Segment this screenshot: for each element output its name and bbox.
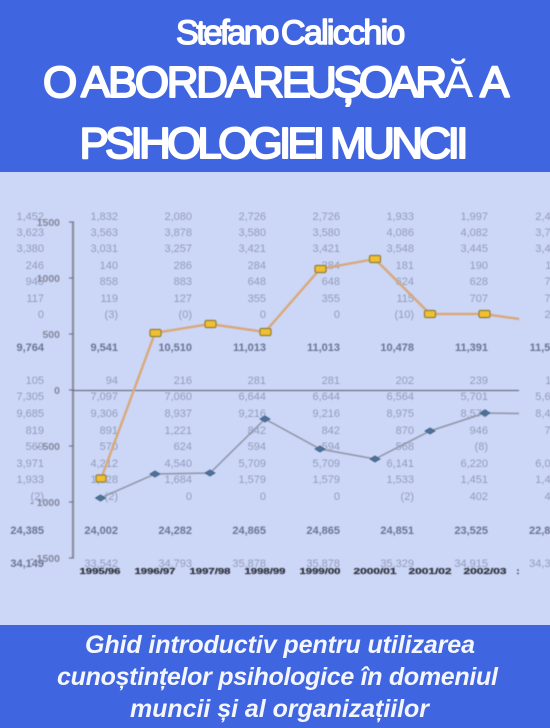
x axis year labels: 2001/02 bbox=[408, 567, 452, 576]
column 6: (2) bbox=[401, 491, 414, 503]
orange series line and markers bbox=[96, 256, 519, 482]
column 3: 4,540 bbox=[164, 458, 192, 470]
column 4: 842 bbox=[248, 425, 266, 437]
column 1: 117 bbox=[26, 293, 44, 305]
column 7: 23,525 bbox=[454, 525, 488, 537]
column 3: 24,282 bbox=[158, 525, 192, 537]
column 2: 94 bbox=[106, 375, 118, 387]
column 1: 0 bbox=[38, 309, 44, 321]
column 4: 35,878 bbox=[232, 558, 266, 570]
y axis with ticks bbox=[69, 222, 74, 558]
column 6: 3,548 bbox=[386, 243, 414, 255]
column 3: 10,510 bbox=[158, 342, 192, 354]
column 6: 10,478 bbox=[380, 342, 414, 354]
column 1: 569 bbox=[26, 441, 44, 453]
y axis labels: - 1500 bbox=[30, 553, 60, 565]
x axis year labels: 2000/01 bbox=[354, 567, 397, 576]
column 4 bbox=[232, 211, 266, 570]
column 6: 568 bbox=[396, 441, 414, 453]
x axis year labels: 1998/99 bbox=[244, 567, 286, 576]
column 6: 6,564 bbox=[386, 391, 414, 403]
panel: header band bbox=[0, 0, 550, 172]
column 1: 1,933 bbox=[16, 474, 44, 486]
x axis year labels: 1999/00 bbox=[300, 567, 341, 576]
column 3: 883 bbox=[174, 276, 192, 288]
column 4: 648 bbox=[248, 276, 266, 288]
column 4: 2,726 bbox=[238, 211, 266, 223]
column 7: 707 bbox=[470, 293, 488, 305]
column 4: 284 bbox=[248, 260, 266, 272]
column 5: 2,726 bbox=[312, 211, 340, 223]
column 7: 3 bbox=[482, 309, 488, 321]
column 6: 6,141 bbox=[386, 458, 414, 470]
column 1: 9,685 bbox=[16, 408, 44, 420]
column 3 bbox=[158, 211, 192, 570]
column 7: 34,915 bbox=[454, 558, 488, 570]
title line 1: O bbox=[43, 58, 77, 107]
column 1: 945 bbox=[26, 276, 44, 288]
x axis year labels: 1997/98 bbox=[190, 567, 231, 576]
x axis year labels: 2002/03 bbox=[464, 567, 507, 576]
column 2: (2) bbox=[105, 491, 118, 503]
column 4: 0 bbox=[260, 491, 266, 503]
x axis year labels: 1995/96 bbox=[80, 567, 121, 576]
column 7: (8) bbox=[475, 441, 488, 453]
column 7: 6,220 bbox=[460, 458, 488, 470]
column 4: 1,579 bbox=[238, 474, 266, 486]
column 4: 3,580 bbox=[238, 227, 266, 239]
column 2: 3,031 bbox=[90, 243, 118, 255]
x axis year labels: : bbox=[517, 567, 519, 576]
data table: faded figures behind the chart bbox=[10, 211, 550, 570]
column 4: 9,216 bbox=[238, 408, 266, 420]
y axis labels: 1500 bbox=[37, 217, 60, 229]
column 1: 7,305 bbox=[16, 391, 44, 403]
column 6: (10) bbox=[394, 309, 414, 321]
column 2: 1,832 bbox=[90, 211, 118, 223]
column 2: 570 bbox=[100, 441, 118, 453]
column 7: 8,570 bbox=[460, 408, 488, 420]
title line 1: ABORDARE bbox=[81, 58, 310, 107]
column 1: 1,452 bbox=[16, 211, 44, 223]
y axis labels: 500 bbox=[42, 329, 60, 341]
column 5: 355 bbox=[322, 293, 340, 305]
column 4: 5,709 bbox=[238, 458, 266, 470]
column 3: (0) bbox=[179, 309, 192, 321]
column 3: 127 bbox=[174, 293, 192, 305]
column 7: 239 bbox=[470, 375, 488, 387]
y axis labels: 1000 bbox=[37, 273, 60, 285]
column 5: 648 bbox=[322, 276, 340, 288]
column 3: 0 bbox=[186, 491, 192, 503]
column 2: 858 bbox=[100, 276, 118, 288]
y axis labels: - 1000 bbox=[30, 497, 60, 509]
column 5: 24,865 bbox=[306, 525, 340, 537]
column 1: 3,623 bbox=[16, 227, 44, 239]
column 7: 1,451 bbox=[460, 474, 488, 486]
y axis labels: - 500 bbox=[36, 441, 60, 453]
column 7: 628 bbox=[470, 276, 488, 288]
panel: chart background bbox=[0, 172, 550, 625]
column 7: 11,391 bbox=[455, 342, 488, 354]
column 8, cropped at the page edge bbox=[529, 211, 550, 570]
column 2: (3) bbox=[105, 309, 118, 321]
column 7: 402 bbox=[470, 491, 488, 503]
column 6: 8,975 bbox=[386, 408, 414, 420]
column 1: 819 bbox=[26, 425, 44, 437]
column 2: 140 bbox=[100, 260, 118, 272]
column 4: 3,421 bbox=[238, 243, 266, 255]
column 4: 6,644 bbox=[238, 391, 266, 403]
column 2: 33,542 bbox=[84, 558, 118, 570]
column 5: 594 bbox=[322, 441, 340, 453]
column 1: 24,385 bbox=[10, 525, 44, 537]
y axis labels: 0 bbox=[54, 385, 60, 397]
column 5: 3,421 bbox=[312, 243, 340, 255]
column 1: 34,149 bbox=[10, 558, 44, 570]
column 7: 946 bbox=[470, 425, 488, 437]
column 4: 594 bbox=[248, 441, 266, 453]
column 6: 1,533 bbox=[386, 474, 414, 486]
column 5: 5,709 bbox=[312, 458, 340, 470]
line chart bbox=[30, 217, 519, 576]
column 5: 0 bbox=[334, 491, 340, 503]
author name: Calicchio bbox=[281, 14, 404, 52]
column 7: 5,701 bbox=[460, 391, 488, 403]
column 3: 286 bbox=[174, 260, 192, 272]
column 5: 842 bbox=[322, 425, 340, 437]
column 2: 7,097 bbox=[90, 391, 118, 403]
column 5: 35,878 bbox=[306, 558, 340, 570]
x axis at zero bbox=[72, 390, 519, 392]
blue series line and markers bbox=[96, 410, 519, 501]
column 3: 1,221 bbox=[164, 425, 192, 437]
column 7 bbox=[454, 211, 488, 570]
column 3: 8,937 bbox=[164, 408, 192, 420]
column 4: 0 bbox=[260, 309, 266, 321]
column 2 bbox=[84, 211, 118, 570]
subtitle line 1: Ghid introductiv pentru utilizarea bbox=[85, 631, 475, 659]
title line 1: A bbox=[480, 58, 510, 107]
title line 1: UȘOARĂ bbox=[305, 58, 469, 107]
column 6: 115 bbox=[396, 293, 414, 305]
column 5: 11,013 bbox=[307, 342, 340, 354]
column 6: 870 bbox=[396, 425, 414, 437]
column 3: 2,080 bbox=[164, 211, 192, 223]
column 1: 3,380 bbox=[16, 243, 44, 255]
column 3: 3,257 bbox=[164, 243, 192, 255]
column 6: 624 bbox=[396, 276, 414, 288]
x axis year labels: 1996/97 bbox=[134, 567, 176, 576]
column 6: 4,086 bbox=[386, 227, 414, 239]
column 6 bbox=[380, 211, 414, 570]
title line 2: MUNCII bbox=[330, 119, 465, 168]
column 1: 246 bbox=[26, 260, 44, 272]
x axis year labels bbox=[80, 567, 519, 576]
author name: Stefano bbox=[176, 14, 278, 52]
column 2: 119 bbox=[100, 293, 118, 305]
column 7: 190 bbox=[470, 260, 488, 272]
subtitle line 3: muncii și al organizațiilor bbox=[130, 695, 430, 723]
column 6: 181 bbox=[396, 260, 414, 272]
column 2: 24,002 bbox=[84, 525, 118, 537]
column 1: 105 bbox=[26, 375, 44, 387]
subtitle line 2: cunoștințelor psihologice în domeniul bbox=[57, 663, 499, 691]
column 5: 9,216 bbox=[312, 408, 340, 420]
column 3: 34,793 bbox=[158, 558, 192, 570]
column 4: 281 bbox=[248, 375, 266, 387]
column 1 bbox=[10, 211, 45, 570]
column 3: 7,060 bbox=[164, 391, 192, 403]
column 1: (2) bbox=[31, 491, 44, 503]
panel: footer band bbox=[0, 625, 550, 728]
column 6: 24,851 bbox=[380, 525, 414, 537]
column 6: 1,933 bbox=[386, 211, 414, 223]
column 6: 202 bbox=[396, 375, 414, 387]
title line 2: PSIHOLOGIEI bbox=[80, 119, 322, 168]
column 2: 1,728 bbox=[90, 474, 118, 486]
column 4: 11,013 bbox=[233, 342, 266, 354]
column 3: 1,684 bbox=[164, 474, 192, 486]
column 1: 3,971 bbox=[16, 458, 44, 470]
column 3: 624 bbox=[174, 441, 192, 453]
column 5: 1,579 bbox=[312, 474, 340, 486]
column 4: 24,865 bbox=[232, 525, 266, 537]
column 2: 891 bbox=[100, 425, 118, 437]
y axis labels bbox=[30, 217, 60, 565]
column 3: 216 bbox=[174, 375, 192, 387]
column 2: 3,563 bbox=[90, 227, 118, 239]
column 5: 3,580 bbox=[312, 227, 340, 239]
column 2: 4,212 bbox=[90, 458, 118, 470]
column 7: 4,082 bbox=[460, 227, 488, 239]
column 2: 9,541 bbox=[90, 342, 118, 354]
column 5: 281 bbox=[322, 375, 340, 387]
column 6: 35,329 bbox=[380, 558, 414, 570]
column 7: 3,445 bbox=[460, 243, 488, 255]
column 5: 6,644 bbox=[312, 391, 340, 403]
column 3: 3,878 bbox=[164, 227, 192, 239]
column 5: 284 bbox=[322, 260, 340, 272]
column 4: 355 bbox=[248, 293, 266, 305]
column 1: 9,764 bbox=[16, 342, 45, 354]
column 5: 0 bbox=[334, 309, 340, 321]
column 7: 1,997 bbox=[460, 211, 488, 223]
column 5 bbox=[306, 211, 340, 570]
column 2: 9,306 bbox=[90, 408, 118, 420]
